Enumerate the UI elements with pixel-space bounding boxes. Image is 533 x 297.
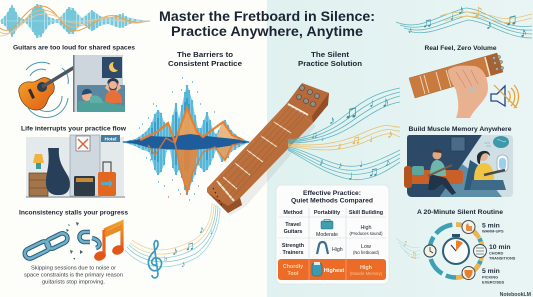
plane scene	[464, 151, 508, 190]
heading: barriers	[168, 50, 242, 68]
label: build muscle memory: Build Muscle Memory Anywhere	[408, 126, 512, 133]
staff: centre right flowing music: ♫	[311, 130, 318, 140]
text: skipping sessions note: guitarists stop improving.	[42, 280, 105, 286]
label: inconsistency: Inconsistency stalls your progress	[19, 210, 128, 216]
row: chordly tool highlighted: Chordly	[283, 264, 303, 270]
table header row: Skill Building	[349, 210, 383, 216]
couch scene	[404, 137, 465, 195]
notes: lower left staff notes	[164, 224, 217, 269]
chart: central sound waveform	[122, 78, 250, 200]
row: chordly tool highlighted: Highest	[324, 268, 344, 274]
staff: top right music: ♪	[458, 2, 464, 17]
heading: solution	[298, 50, 362, 68]
row: chordly tool highlighted: Tool	[288, 271, 299, 277]
table header row	[283, 210, 383, 216]
step: picking exercises: EXERCISES	[482, 280, 505, 284]
icon: silent practice neck	[207, 83, 329, 216]
icon: hand on silent fretboard	[409, 53, 504, 118]
title: Master the Fretboard in Silence:	[159, 9, 375, 24]
text: skipping sessions note: Skipping sessions due to noise or	[31, 266, 116, 272]
step: chord transitions: 10 min	[489, 244, 511, 251]
staff: centre right flowing music: ♩	[348, 168, 361, 183]
label: real feel: Real Feel, Zero Volume	[424, 45, 497, 52]
stopwatch	[443, 234, 469, 264]
title: Practice Anywhere, Anytime	[171, 24, 364, 39]
icon: broken chain	[23, 222, 125, 262]
icon: muted speaker	[491, 85, 518, 108]
row: strength trainers: Strength	[282, 243, 304, 249]
table title: Quiet Methods Compared	[291, 198, 373, 204]
staff: centre right flowing music: ♪	[321, 137, 324, 143]
notes: lower left staff notes: ♪	[199, 224, 204, 236]
panel: anywhere scenes	[404, 135, 513, 197]
row: travel guitars: Moderate	[316, 232, 338, 238]
label: guitars too loud: Guitars are too loud for shared spaces	[13, 44, 135, 52]
title	[159, 9, 375, 39]
row: strength trainers: Trainers	[283, 250, 303, 256]
notes: routine side staff	[396, 238, 420, 260]
staff: top right music: ♪	[408, 25, 412, 35]
staff: centre right flowing music: ♪	[387, 127, 393, 141]
table header row: Method	[283, 210, 303, 216]
step: picking exercises: 5 min	[482, 268, 500, 275]
staff: centre right flowing music: ♪	[385, 157, 390, 169]
small clock	[424, 245, 436, 257]
staff: top right music: ♩	[450, 11, 461, 23]
heading: barriers: Consistent Practice	[168, 59, 242, 68]
table title: Effective Practice:	[303, 190, 361, 197]
row: travel guitars: Travel	[285, 222, 301, 228]
step: chord transitions: TRANSITIONS	[489, 256, 516, 260]
row: strength trainers: High	[332, 247, 343, 253]
step: picking exercises	[462, 266, 505, 284]
label: life interrupts: Life interrupts your practice flow	[21, 126, 126, 132]
staff: lower left curving music	[125, 203, 220, 278]
staff: centre right flowing music: ♩	[369, 95, 382, 110]
text: skipping sessions note: space constraints is the primary reason	[24, 272, 123, 278]
notes: lower left staff notes: ♫	[185, 238, 195, 253]
staff: top right music	[396, 2, 532, 40]
staff: centre right flowing music: ♪	[338, 160, 342, 170]
staff: top right music: ♫	[505, 10, 518, 29]
staff: centre right flowing music: ♪	[337, 141, 342, 152]
label: routine: A 20-Minute Silent Routine	[417, 209, 503, 216]
step: warm-ups: 5 min	[482, 222, 500, 230]
brain icon	[484, 136, 509, 148]
panel: comparison table	[276, 185, 389, 284]
notes: lower left staff notes: ♪	[181, 259, 186, 269]
row: travel guitars	[284, 220, 383, 238]
staff: top right music: ♪	[474, 5, 483, 21]
staff: centre right flowing music: ♪	[382, 94, 390, 111]
staff: centre right flowing music	[288, 88, 400, 183]
row: travel guitars: Guitars	[284, 229, 302, 235]
table title	[291, 190, 373, 204]
icon: travel and clutter scene	[26, 135, 125, 197]
row: chordly tool highlighted: (Muscle Memory)	[350, 271, 383, 276]
icon: loud acoustic guitar	[19, 59, 85, 118]
staff: centre right flowing music: ♫	[344, 102, 358, 123]
heading: solution: Practice Solution	[298, 59, 362, 68]
row: travel guitars: High	[360, 225, 372, 231]
step: warm-ups	[462, 220, 504, 234]
row: chordly tool highlighted: High	[360, 265, 372, 271]
step: picking exercises: PICKING	[482, 274, 498, 280]
background: left half	[0, 0, 267, 297]
heading: barriers: The Barriers to	[177, 50, 234, 59]
icon: bedroom disturbed	[73, 55, 125, 112]
row: chordly tool highlighted	[278, 259, 386, 280]
text: skipping sessions note	[24, 266, 123, 286]
heading: solution: The Silent	[311, 50, 350, 59]
staff: centre right flowing music: ♩	[369, 133, 380, 145]
notes: lower left staff notes: ♩	[210, 229, 217, 236]
staff: centre right flowing music: ♫	[368, 163, 378, 179]
icon: treble clef	[148, 241, 162, 278]
row: strength trainers: (No fretboard)	[353, 250, 380, 255]
background: right half	[267, 0, 533, 297]
staff: centre right flowing music: ♩	[359, 158, 370, 170]
staff: centre right flowing music: ♪	[329, 113, 335, 127]
staff: top right music: ♫	[422, 14, 432, 30]
waveform: top left	[0, 4, 150, 38]
staff: centre right flowing music: ♪	[319, 157, 324, 168]
staff: top right music: ♪	[486, 17, 492, 32]
step: chord transitions: CHORD	[489, 250, 503, 256]
notes: lower left staff notes: ♭	[164, 254, 168, 263]
chart: routine ring with stopwatch	[424, 220, 487, 282]
icon: travel and clutter scene: Hotel	[104, 136, 116, 142]
notes: routine side staff: ♪	[403, 240, 407, 248]
staff: centre right flowing music: ♫	[351, 132, 361, 147]
step: warm-ups: WARM-UPS	[482, 228, 504, 234]
table header row: Portability	[314, 210, 340, 216]
row: travel guitars: (Produces sound)	[349, 231, 383, 236]
row: strength trainers: Low	[361, 244, 371, 250]
notes: lower left staff notes: ♪	[172, 244, 178, 258]
step: chord transitions	[474, 244, 516, 260]
notes: routine side staff: ♫	[410, 251, 417, 260]
row: strength trainers	[282, 242, 380, 256]
staff: top right music: ♪	[520, 24, 527, 40]
